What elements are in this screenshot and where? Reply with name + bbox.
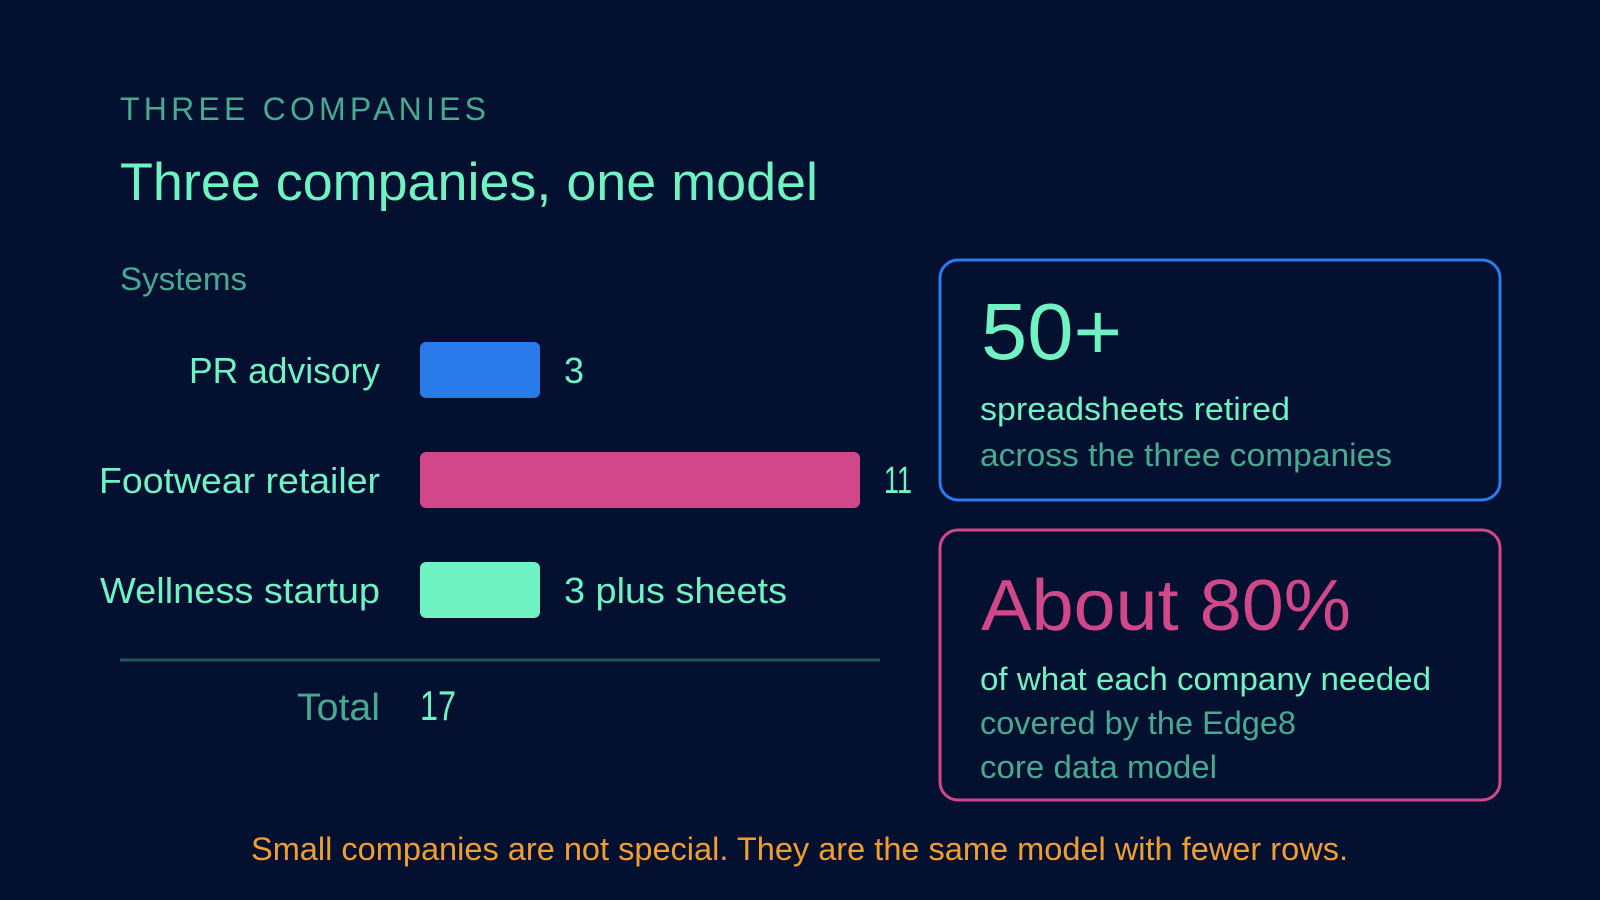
total row: 17 (420, 682, 456, 729)
stat context: covered by the Edge8 (980, 705, 1296, 741)
eyebrow label: THREE COMPANIES (120, 91, 486, 127)
big stat: About 80%: About 80% (981, 566, 1351, 646)
stat context (980, 705, 1296, 785)
stat description: spreadsheets retired (980, 391, 1290, 427)
stat context: across the three companies (980, 437, 1392, 473)
footer takeaway: Small companies are not special. They are the same model with fewer rows. (251, 831, 1348, 867)
total row (297, 682, 456, 729)
row: PR advisory (189, 342, 584, 398)
row: Footwear retailer (99, 452, 912, 508)
row: Wellness startup: 3 plus sheets (564, 570, 787, 611)
panel: spreadsheets retired (940, 260, 1500, 500)
bar chart: systems per company (99, 261, 912, 729)
row: PR advisory: 3 (564, 350, 584, 391)
row: Footwear retailer: Footwear retailer (99, 460, 380, 501)
stat description: of what each company needed (980, 661, 1431, 697)
row: Wellness startup (100, 562, 787, 618)
panel: data model coverage (940, 530, 1500, 800)
title: Three companies, one model (120, 153, 818, 212)
chart heading: Systems (120, 261, 247, 297)
total row: Total (297, 687, 380, 729)
row: Footwear retailer: 11 (884, 460, 912, 502)
row: PR advisory: PR advisory (189, 350, 380, 391)
big stat: 50+: 50+ (981, 287, 1122, 376)
stat context: core data model (980, 749, 1217, 785)
row: Wellness startup: Wellness startup (100, 570, 380, 611)
